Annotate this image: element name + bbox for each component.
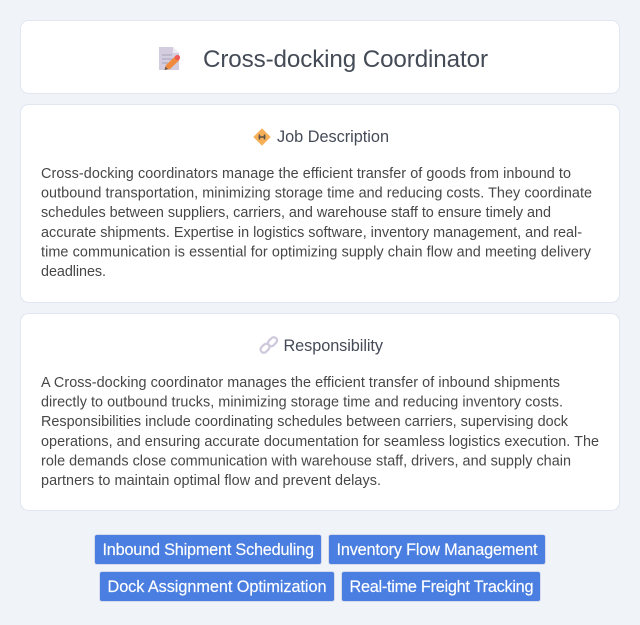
icon: orange diamond sign xyxy=(254,129,270,145)
heading: responsibility: Responsibility xyxy=(284,337,384,355)
text block: responsibility: partners to maintain optimal flow and prevent delays. xyxy=(41,473,381,489)
text block: responsibility: directly to outbound trucks, minimizing storage time and reducing inventory costs. xyxy=(41,395,563,411)
text block: job description: schedules between suppliers, carriers, and warehouse staff to ensure timely and xyxy=(41,205,551,221)
tag: real-time freight tracking xyxy=(342,572,540,602)
tag: dock assignment optimization xyxy=(100,572,334,602)
text block: job description: time communication is essential for optimizing supply chain flow and meeting delivery xyxy=(41,244,592,260)
tag: inbound shipment scheduling xyxy=(94,534,322,564)
tag: inventory flow management: Inventory Flow Management xyxy=(336,541,538,559)
panel: job description xyxy=(20,104,620,302)
text block: responsibility xyxy=(41,375,599,489)
title: Cross-docking Coordinator xyxy=(203,46,488,73)
panel: responsibility xyxy=(20,314,620,510)
text block: responsibility: role demands close communication with warehouse staff, drivers, and supply chain xyxy=(41,453,571,469)
tag: real-time freight tracking: Real-time Freight Tracking xyxy=(350,578,534,596)
tag: inbound shipment scheduling: Inbound Shipment Scheduling xyxy=(102,541,314,559)
icon: document with pencil xyxy=(159,47,180,70)
text block: job description: outbound transportation, minimizing storage time and reducing costs. They coordinate xyxy=(41,186,592,202)
icon: chain link xyxy=(259,336,278,354)
heading: job description: Job Description xyxy=(277,128,389,146)
text block: responsibility: A Cross-docking coordinator manages the efficient transfer of inbound shipments xyxy=(41,375,560,391)
text block: job description: Cross-docking coordinators manage the efficient transfer of goods from inbound to xyxy=(41,166,571,182)
text block: responsibility: operations, and ensuring accurate documentation for seamless logistics execution. The xyxy=(41,434,599,450)
text block: job description: deadlines. xyxy=(41,264,106,280)
tag: inventory flow management xyxy=(328,534,546,564)
text block: responsibility: Responsibilities include coordinating schedules between carriers, supervising dock xyxy=(41,414,569,430)
tag: dock assignment optimization: Dock Assignment Optimization xyxy=(108,578,326,596)
panel: title card xyxy=(20,20,620,94)
text block: job description: accurate shipments. Expertise in logistics software, inventory management, and real- xyxy=(41,225,582,241)
text block: job description xyxy=(41,166,592,280)
